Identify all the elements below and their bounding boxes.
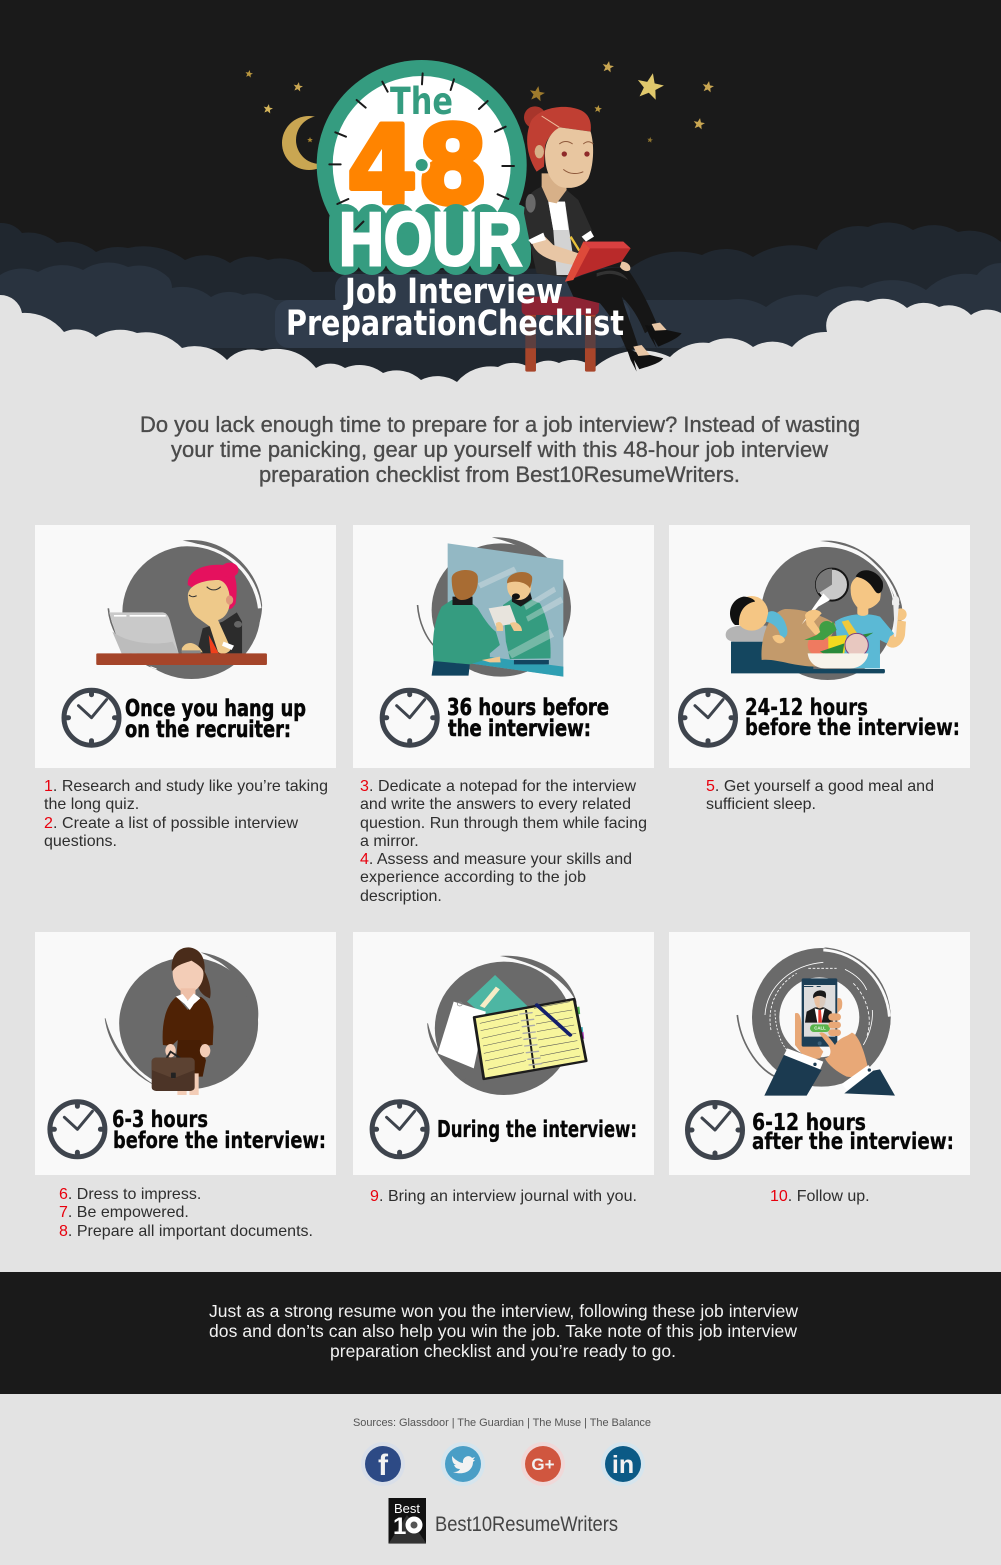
text block: steps 1-2: 2. Create a list of possible interview	[44, 815, 298, 832]
hair	[172, 947, 211, 998]
laptop	[109, 612, 179, 653]
tabs	[574, 1007, 580, 1015]
support agent	[805, 1007, 833, 1023]
panel: 6-3 hours	[35, 932, 336, 1175]
fingers	[837, 998, 842, 1013]
title text: Job Interview: Job Interview	[343, 272, 563, 312]
chair	[522, 297, 599, 372]
icon: woman at laptop	[96, 540, 267, 679]
closing band: dos and don’ts can also help you win the job. Take note of this job interview	[209, 1321, 797, 1341]
pen	[537, 1005, 570, 1035]
phone	[802, 978, 837, 1047]
panel: 6-12 hours	[669, 932, 970, 1175]
open journal	[474, 999, 586, 1079]
call button	[810, 1024, 830, 1032]
icon: clock	[64, 690, 119, 745]
logo mark: 1	[393, 1513, 406, 1540]
heading	[112, 1107, 326, 1154]
icon: linkedin: in	[612, 1451, 634, 1479]
back hand	[795, 1013, 823, 1060]
logo mark: Best	[394, 1501, 420, 1516]
title word: The: The	[390, 80, 453, 123]
face	[188, 580, 230, 622]
clock title badge	[317, 60, 531, 281]
heading: 6-12 hours	[752, 1110, 866, 1136]
text block: step 5: 5. Get yourself a good meal and	[706, 778, 934, 795]
heading: 36 hours before	[447, 695, 609, 721]
bun	[524, 106, 546, 128]
text block: step 5	[706, 778, 934, 813]
text block: steps 6-8	[59, 1186, 313, 1240]
trousers	[567, 268, 657, 352]
food	[808, 634, 829, 656]
icon: facebook: f	[378, 1449, 389, 1482]
front cloud layer	[0, 295, 1001, 520]
fork and hand	[802, 593, 830, 624]
jacket and body	[524, 187, 593, 277]
sleeper bed	[731, 642, 885, 673]
intro paragraph	[140, 412, 860, 487]
legs	[177, 1073, 199, 1095]
closing band	[0, 1272, 1001, 1394]
icon: facebook	[361, 1442, 405, 1486]
text block: steps 3-4: description.	[360, 888, 442, 905]
intro paragraph: preparation checklist from Best10ResumeWriters.	[259, 462, 740, 487]
pointing hand	[819, 1032, 867, 1077]
heading: after the interview:	[752, 1129, 954, 1155]
heading	[125, 696, 306, 743]
text block: steps 3-4: and write the answers to every related	[360, 796, 631, 813]
text block: steps 6-8: 6. Dress to impress.	[59, 1186, 201, 1203]
icon: man rehearsing at mirror	[418, 537, 571, 677]
text block: steps 3-4: 3. Dedicate a notepad for the interview	[360, 778, 636, 795]
logo	[388, 1498, 618, 1544]
text block: steps 1-2: the long quiz.	[44, 796, 139, 813]
text block: steps 3-4: experience according to the job	[360, 869, 586, 886]
wall clock	[816, 569, 848, 601]
call button: CALL	[814, 1026, 826, 1031]
icon: twitter	[441, 1442, 485, 1486]
closing band: preparation checklist and you’re ready to go.	[330, 1341, 676, 1361]
icon: clock	[382, 690, 437, 745]
jacket	[197, 612, 242, 653]
bowl	[808, 653, 868, 668]
title text: Preparation Checklist: PreparationChecklist	[286, 304, 624, 344]
icon: clock	[688, 1102, 742, 1158]
icon: clock	[372, 1102, 427, 1157]
back cloud layer	[0, 223, 1001, 392]
illustration: woman sitting with notebook	[522, 106, 682, 372]
heading: before the interview:	[113, 1128, 326, 1154]
logo mark	[388, 1498, 426, 1544]
desk	[96, 653, 267, 665]
clock centre dot	[413, 156, 430, 174]
icon: linkedin	[601, 1442, 645, 1486]
header night sky	[0, 0, 1001, 392]
heading	[752, 1110, 954, 1155]
red notebook	[565, 242, 631, 282]
heading: 6-3 hours	[112, 1107, 208, 1133]
text block: steps 6-8: 7. Be empowered.	[59, 1204, 189, 1221]
heading	[447, 695, 609, 742]
icon: meal and sleep	[726, 541, 907, 680]
heading	[745, 695, 960, 741]
icon: google plus: G+	[531, 1455, 555, 1474]
hour badge	[329, 204, 531, 275]
reflection	[503, 599, 551, 659]
icon: google plus	[521, 1442, 565, 1486]
white note	[438, 1002, 486, 1068]
arm and sleeves	[532, 237, 578, 265]
text block: step 9: 9. Bring an interview journal with you.	[370, 1188, 637, 1205]
paper and hands	[489, 605, 517, 627]
title word: HOUR: HOUR	[339, 197, 522, 281]
text block: step 10: 10. Follow up.	[770, 1188, 870, 1205]
face	[545, 127, 593, 188]
logo wordmark: Best10ResumeWriters	[435, 1513, 618, 1536]
sources: Sources: Glassdoor | The Guardian | The Muse | The Balance	[353, 1417, 651, 1429]
arm	[199, 614, 231, 654]
panel: once you hang up	[35, 525, 336, 768]
heading: During the interview:	[437, 1117, 637, 1143]
text block: steps 3-4: a mirror.	[360, 833, 419, 850]
hair	[527, 107, 591, 172]
eater	[835, 614, 894, 668]
icon: clock	[50, 1102, 105, 1157]
text block: steps 3-4: 4. Assess and measure your skills and	[360, 851, 632, 868]
panel: 24-12 hours	[669, 525, 970, 768]
text block: steps 1-2: questions.	[44, 833, 117, 850]
panel: 36 hours before	[353, 525, 654, 768]
title backdrop band	[275, 274, 630, 348]
icon: businesswoman with briefcase	[105, 947, 258, 1095]
heading: Once you hang up	[125, 696, 306, 722]
mirror	[448, 543, 563, 677]
text block: steps 1-2	[44, 778, 328, 850]
hair	[188, 565, 237, 609]
man from behind	[433, 600, 500, 664]
stars and moon	[245, 60, 715, 170]
blanket	[761, 609, 837, 667]
title number: 48: 48	[347, 104, 488, 229]
icon: phone call	[737, 947, 895, 1096]
face and neck	[173, 961, 203, 993]
intro paragraph: Do you lack enough time to prepare for a job interview? Instead of wasting	[140, 412, 860, 437]
heading: the interview:	[448, 716, 591, 742]
middle cloud layer	[0, 263, 1001, 348]
text block: step 5: sufficient sleep.	[706, 796, 816, 813]
eyes and smile	[562, 151, 590, 157]
text block: steps 1-2: 1. Research and study like you’re taking	[44, 778, 328, 795]
text block: steps 6-8: 8. Prepare all important documents.	[59, 1223, 313, 1240]
intro paragraph: your time panicking, gear up yourself with this 48-hour job interview	[171, 437, 828, 462]
sleeves	[784, 1048, 823, 1072]
heading: on the recruiter:	[125, 717, 291, 743]
teal notebook	[467, 975, 528, 1015]
high heels	[645, 325, 682, 348]
clock ticks	[329, 73, 514, 204]
briefcase	[167, 1052, 181, 1058]
icon: clock	[680, 690, 736, 745]
heading: 24-12 hours	[745, 695, 868, 721]
text block: steps 3-4	[360, 778, 647, 905]
icon: interview journal	[428, 956, 586, 1095]
jacket	[163, 997, 214, 1046]
panel: during the interview	[353, 932, 654, 1175]
text block: steps 3-4: question. Run through them while facing	[360, 815, 647, 832]
closing band: Just as a strong resume won you the interview, following these job interview	[209, 1301, 798, 1321]
hands	[165, 1044, 176, 1057]
neck	[542, 173, 567, 203]
